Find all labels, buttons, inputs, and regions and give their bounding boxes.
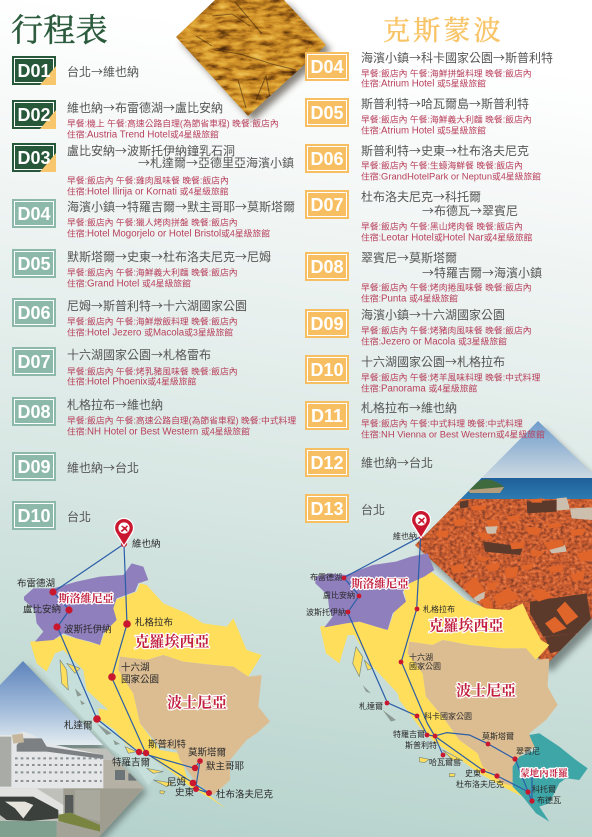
day D10 Kosmopol [305, 353, 541, 394]
day D03: D03 [17, 148, 51, 168]
day D06 Kosmopol: 斯普利特→史東→杜布洛夫尼克 [361, 142, 529, 159]
day D09: D09 [17, 457, 51, 477]
day D02: 住宿:Austria Trend Hotel或4星級旅館 [67, 128, 219, 140]
day D07 Kosmopol: 早餐:飯店內 午餐:黑山烤肉餐 晚餐:飯店內 [361, 220, 523, 232]
day D11 Kosmopol: D11 [311, 406, 343, 426]
day D09 Kosmopol: D09 [310, 314, 344, 334]
photo: Dubrovnik old town [410, 420, 592, 674]
city labels: 布雷德湖 [17, 578, 55, 590]
day D02 [12, 99, 279, 140]
day D07 [12, 346, 238, 388]
city labels: 十六湖 [121, 662, 150, 674]
day D04: D04 [17, 204, 51, 224]
day D04 Kosmopol [305, 49, 553, 90]
day D07: 住宿:Hotel Phoenix或4星級旅館 [67, 376, 196, 388]
day D08 Kosmopol: →特羅吉爾→海濱小鎮 [422, 264, 542, 281]
day D07: 十六湖國家公園→札格雷布 [67, 346, 211, 363]
day D08 Kosmopol: D08 [310, 257, 344, 277]
day D13 Kosmopol: 台北 [361, 501, 385, 518]
route lines [53, 544, 209, 793]
day D05 Kosmopol: 斯普利特→哈瓦爾島→斯普利特 [361, 95, 529, 112]
day D11 Kosmopol: 早餐:飯店內 午餐:中式料理 晚餐:中式料理 [361, 418, 523, 428]
day D08 [12, 396, 296, 438]
country labels: 斯洛維尼亞 [351, 576, 409, 590]
city labels: 尼姆 [167, 776, 187, 788]
day D10: D10 [17, 506, 51, 526]
city labels: 杜布洛夫尼克 [456, 779, 504, 789]
day D07 Kosmopol: →布德瓦→翠賓尼 [422, 202, 518, 219]
city labels: 杜布洛夫尼克 [216, 788, 274, 800]
day D05 Kosmopol: 住宿:Atrium Hotel 或5星級旅館 [361, 124, 486, 136]
city labels: 盧比安納 [323, 590, 355, 600]
city labels: 默主哥耶 [206, 760, 245, 772]
day D06: 尼姆→斯普利特→十六湖國家公園 [67, 297, 247, 314]
right route map [306, 510, 588, 822]
day D07: D07 [17, 352, 51, 372]
photo: cave stalactites [170, 0, 331, 121]
day D12 Kosmopol: D12 [310, 453, 344, 473]
day D05 [12, 248, 271, 290]
day D04 [12, 198, 295, 240]
day D08 Kosmopol [305, 249, 542, 304]
city labels: 布雷德湖 [310, 572, 342, 582]
day D12 Kosmopol: 維也納→台北 [361, 454, 433, 471]
city labels: 維也納 [132, 538, 161, 550]
day D12 Kosmopol [305, 448, 433, 477]
map regions [315, 553, 588, 822]
city labels: 札格拉布 [135, 616, 173, 628]
day D04: 住宿:Hotel Mogorjelo or Hotel Bristol或4星級旅館 [67, 228, 270, 240]
day D08: 住宿:NH Hotel or Best Western 或4星級旅館 [67, 426, 250, 438]
day D03: 早餐:飯店內 午餐:雞肉風味餐 晚餐:飯店內 [67, 174, 229, 186]
photo: Ljubljana triple bridge [0, 660, 155, 837]
day D04 Kosmopol: 住宿:Atrium Hotel 或5星級旅館 [361, 78, 486, 90]
day D09: 維也納→台北 [67, 459, 139, 476]
day D13 Kosmopol: D13 [310, 499, 344, 519]
day D08: 札格拉布→維也納 [67, 396, 163, 413]
country labels: 克羅埃西亞 [134, 632, 210, 650]
country labels [58, 591, 227, 712]
route stops [342, 535, 535, 804]
country labels [351, 576, 568, 780]
day D09 Kosmopol: 早餐:飯店內 午餐:烤豬肉風味餐 晚餐:飯店內 [361, 324, 532, 336]
city labels: 科卡國家公園 [424, 711, 472, 721]
day D08: 早餐:飯店內 午餐:高速公路自理(為節省車程) 晚餐:中式料理 [67, 414, 296, 426]
day D05: 默斯塔爾→史東→杜布洛夫尼克→尼姆 [67, 248, 271, 265]
country labels: 克羅埃西亞 [428, 616, 504, 634]
day D09 Kosmopol [305, 306, 532, 348]
right column itinerary [305, 49, 553, 523]
day D11 Kosmopol: 住宿:NH Vienna or Best Western或4星級旅館 [361, 428, 545, 440]
city labels: 十六湖 [409, 652, 433, 662]
day D08 Kosmopol: 早餐:飯店內 午餐:烤肉捲風味餐 晚餐:飯店內 [361, 282, 532, 292]
day D03: 住宿:Hotel Ilirija or Kornati 或4星級旅館 [67, 186, 229, 198]
day D11 Kosmopol [305, 399, 545, 440]
city labels [306, 531, 561, 805]
left column itinerary [12, 56, 296, 530]
city labels: 札達爾 [359, 701, 383, 711]
day D06: D06 [17, 303, 51, 323]
city labels: 國家公園 [121, 674, 159, 686]
day D10 Kosmopol: 住宿:Panorama 或4星級旅館 [361, 382, 478, 394]
city labels: 札達爾 [64, 720, 93, 732]
city labels: 莫斯塔爾 [482, 731, 514, 741]
day D07 Kosmopol: 杜布洛夫尼克→科托爾 [361, 188, 481, 205]
country labels: 波士尼亞 [456, 682, 516, 700]
city labels: 波斯托伊納 [64, 624, 112, 636]
day D05 Kosmopol [305, 95, 532, 136]
day D10 [12, 501, 91, 530]
city labels: 斯普利特 [148, 738, 187, 750]
day D04: 海濱小鎮→特羅吉爾→默主哥耶→莫斯塔爾 [67, 198, 295, 215]
city labels: 札格拉布 [423, 604, 455, 614]
country labels: 斯洛維尼亞 [58, 591, 114, 605]
day D06 Kosmopol: 住宿:GrandHotelPark or Neptun或4星級旅館 [361, 170, 541, 182]
day D05 Kosmopol: D05 [310, 103, 344, 123]
day D05: 住宿:Grand Hotel 或4星級旅館 [67, 278, 191, 290]
city labels: 維也納 [393, 531, 417, 541]
city labels: 波斯托伊納 [306, 607, 346, 617]
day D08 Kosmopol: 住宿:Punta 或4星級旅館 [361, 292, 458, 304]
day D09 [12, 452, 139, 481]
icon: airport pin [114, 518, 133, 546]
day D06 [12, 297, 247, 338]
day D13 Kosmopol [305, 494, 385, 523]
day D10 Kosmopol: 十六湖國家公園→札格拉布 [361, 353, 505, 370]
city labels: 特羅吉爾 [393, 729, 425, 739]
title: Kosmopol tour: 克斯蒙波 [383, 16, 504, 46]
day D02: 早餐:機上 午餐:高速公路自理(為節省車程) 晚餐:飯店內 [67, 118, 279, 128]
day D10 Kosmopol: D10 [310, 360, 344, 380]
day D07 Kosmopol: 住宿:Leotar Hotel或Hotel Nar或4星級旅館 [361, 232, 533, 244]
country labels: 蒙地內哥羅 [520, 768, 568, 780]
city labels: 特羅吉爾 [112, 756, 151, 768]
day D01: 台北→維也納 [67, 63, 139, 80]
day D06: 早餐:飯店內 午餐:海鮮燉飯料理 晚餐:飯店內 [67, 316, 238, 326]
day D03 [12, 142, 294, 198]
day D04 Kosmopol: 早餐:飯店內 午餐:海鮮拼盤料理 晚餐:飯店內 [361, 68, 532, 78]
icon: airport pin [411, 510, 430, 538]
city labels: 翠賓尼 [516, 746, 540, 756]
city labels [17, 538, 274, 800]
day D02: D02 [17, 105, 51, 125]
day D03: 盧比安納→波斯托伊納鐘乳石洞 [67, 142, 235, 159]
country labels: 波士尼亞 [167, 694, 227, 712]
day D05: D05 [17, 254, 51, 274]
route stops [49, 541, 212, 796]
day D01 [12, 56, 139, 85]
day D09 Kosmopol: 海濱小鎮→十六湖國家公園 [361, 306, 505, 323]
city labels: 國家公園 [409, 661, 441, 671]
day D05 Kosmopol: 早餐:飯店內 午餐:海鮮義大利麵 晚餐:飯店內 [361, 114, 532, 124]
day D06 Kosmopol [305, 142, 541, 182]
map regions [23, 563, 270, 809]
day D04 Kosmopol: D04 [310, 57, 344, 77]
left route map [17, 518, 274, 809]
day D10: 台北 [67, 508, 91, 525]
day D10 Kosmopol: 早餐:飯店內 午餐:烤羊風味料理 晚餐:中式料理 [361, 372, 541, 382]
day D08 Kosmopol: 翠賓尼→莫斯塔爾 [361, 249, 457, 266]
city labels: 莫斯塔爾 [188, 746, 227, 758]
city labels: 盧比安納 [23, 604, 61, 616]
city labels: 科托爾 [532, 784, 556, 794]
city labels: 斯普利特 [405, 740, 437, 750]
day D06: 住宿:Hotel Jezero 或Macola或3星級旅館 [67, 326, 233, 338]
day D02: 維也納→布雷德湖→盧比安納 [67, 99, 223, 116]
day D09 Kosmopol: 住宿:Jezero or Macola 或3星級旅館 [361, 336, 507, 348]
day D04 Kosmopol: 海濱小鎮→科卡國家公園→斯普利特 [361, 49, 553, 66]
city labels: 布德瓦 [537, 795, 561, 805]
day D08: D08 [17, 402, 51, 422]
route lines [344, 537, 532, 802]
day D07 Kosmopol: D07 [310, 195, 344, 215]
day D11 Kosmopol: 札格拉布→維也納 [361, 399, 457, 416]
city labels: 史東 [175, 786, 195, 798]
day D07 Kosmopol [305, 188, 533, 244]
day D05: 早餐:飯店內 午餐:海鮮義大利麵 晚餐:飯店內 [67, 266, 238, 278]
day D01: D01 [17, 61, 51, 81]
city labels: 史東 [465, 768, 481, 778]
day D07: 早餐:飯店內 午餐:烤乳豬風味餐 晚餐:飯店內 [67, 366, 238, 376]
city labels: 哈瓦爾島 [429, 757, 461, 767]
day D06 Kosmopol: D06 [310, 149, 344, 169]
day D06 Kosmopol: 早餐:飯店內 午餐:生蠔海鮮餐 晚餐:飯店內 [361, 160, 523, 170]
day D04: 早餐:飯店內 午餐:獵人烤肉拼盤 晚餐:飯店內 [67, 216, 238, 228]
day D03: →札達爾→亞德里亞海濱小鎮 [138, 154, 294, 171]
title: itinerary: 行程表 [11, 12, 108, 48]
